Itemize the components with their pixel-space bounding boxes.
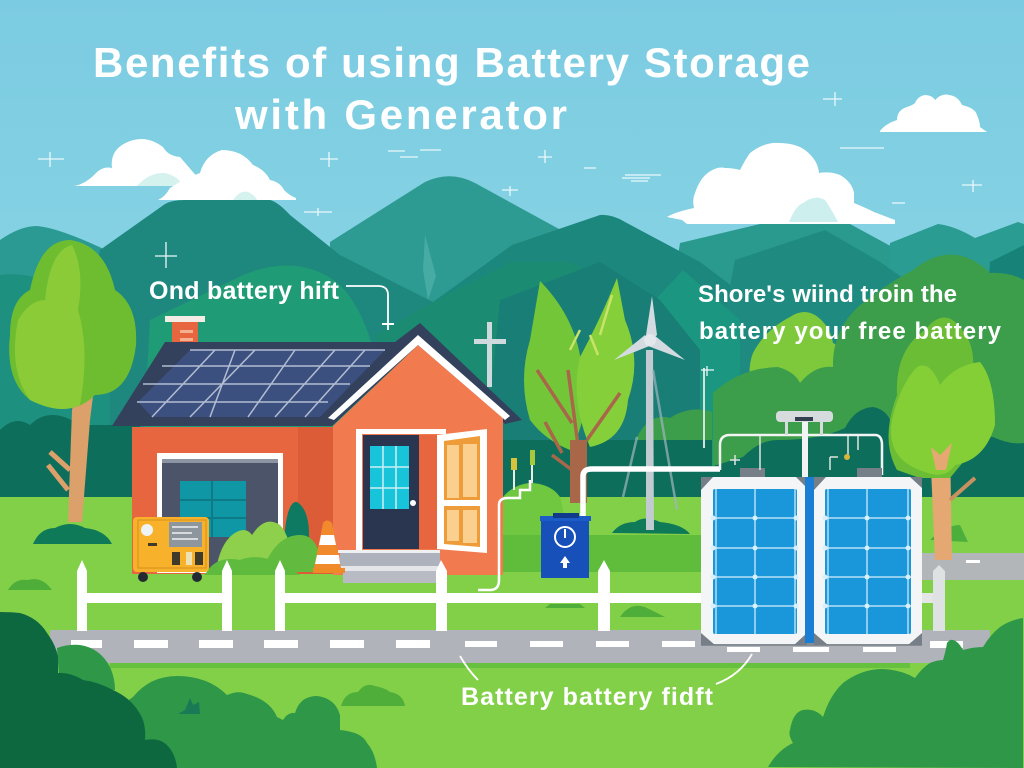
- green hill behind right label: [713, 255, 1024, 500]
- bushes by house: [205, 502, 322, 575]
- steps: [338, 550, 440, 583]
- label: bottom battery: Battery battery fidft: [461, 683, 714, 711]
- label: battery lift: [149, 277, 394, 330]
- label: bottom battery: [460, 654, 752, 711]
- left tree: [9, 240, 136, 522]
- main wall: [132, 427, 333, 574]
- title: Benefits of using Battery Storage: [93, 39, 810, 86]
- battery unit left: [701, 477, 807, 645]
- distant mountains: [0, 176, 1024, 500]
- title: with Generator: [234, 91, 567, 138]
- traffic cone: [313, 520, 345, 573]
- conduit on house wall: [478, 480, 530, 590]
- gable wall: [333, 345, 503, 575]
- label: battery lift: Ond battery hift: [149, 277, 340, 305]
- battery storage solar units: [701, 477, 922, 646]
- sky background: [0, 0, 1024, 300]
- open door: [437, 429, 487, 553]
- white pipe from box to battery: [583, 469, 720, 516]
- blue inverter box: [540, 513, 591, 578]
- dark forest band: [0, 407, 1024, 500]
- label: wind note: Shore's wiind troin the: [698, 281, 957, 308]
- foreground bushes bottom left: [0, 612, 377, 768]
- cloud center right: [667, 143, 895, 224]
- thin antenna: [703, 368, 705, 448]
- utility pole: [474, 322, 506, 387]
- upper right road: [920, 553, 1024, 580]
- house: [112, 316, 522, 583]
- roof: [112, 323, 522, 426]
- sky sparkles: [38, 92, 982, 376]
- battery unit right: [814, 477, 922, 645]
- garage: [157, 453, 283, 573]
- light green bush behind label: [749, 312, 850, 400]
- chimney: [165, 316, 205, 352]
- generator: [133, 517, 209, 582]
- front door: [356, 429, 446, 551]
- label: wind note: battery your free battery: [699, 318, 1002, 345]
- title: [93, 39, 810, 138]
- fence: [77, 560, 945, 631]
- solar panels on roof: [137, 350, 385, 417]
- road: [50, 630, 990, 668]
- bush between turbine and antenna: [637, 410, 712, 450]
- lower lawn: [0, 660, 1024, 768]
- ground: [0, 497, 1024, 672]
- foreground bushes bottom right: [768, 618, 1023, 768]
- darker lawn patches: [503, 535, 705, 572]
- wind turbine: [614, 296, 685, 530]
- center tree with leaves: [524, 278, 634, 503]
- right tree: [888, 318, 995, 560]
- light bush by conduit: [503, 483, 565, 535]
- small meters: [511, 450, 535, 490]
- small bushes: [8, 518, 968, 706]
- blue connector: [805, 477, 814, 643]
- label: wind note: [698, 281, 1002, 345]
- battery pipes on top: [720, 411, 882, 480]
- cloud top right: [880, 95, 987, 132]
- cloud left: [74, 139, 296, 200]
